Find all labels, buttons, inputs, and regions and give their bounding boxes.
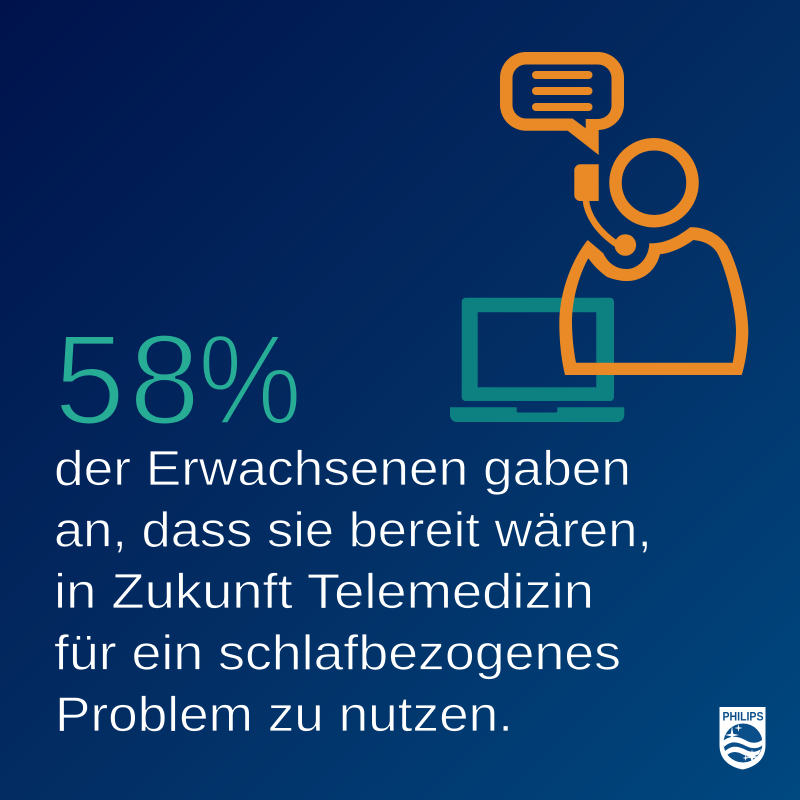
body text: für ein schlafbezogenes [54,626,621,680]
icon: head [616,144,692,221]
big number [54,309,302,452]
body text: Problem zu nutzen. [55,687,513,742]
icon: speech bubble [500,52,624,155]
icon: laptop [450,298,624,422]
icon: shoulders [559,227,748,375]
big number: 8 [129,309,200,452]
logo: Philips shield [720,707,766,770]
logo: Philips shield: PHILIPS [722,710,764,724]
big number: 5 [54,309,125,452]
body text: der Erwachsenen gaben [54,441,631,496]
body text [54,441,652,742]
body text: in Zukunft Telemedizin [54,564,594,619]
body text: an, dass sie bereit wären, [54,502,652,558]
icon: call centre agent [500,52,748,375]
big number: % [198,309,302,452]
icon: headset [574,164,636,256]
